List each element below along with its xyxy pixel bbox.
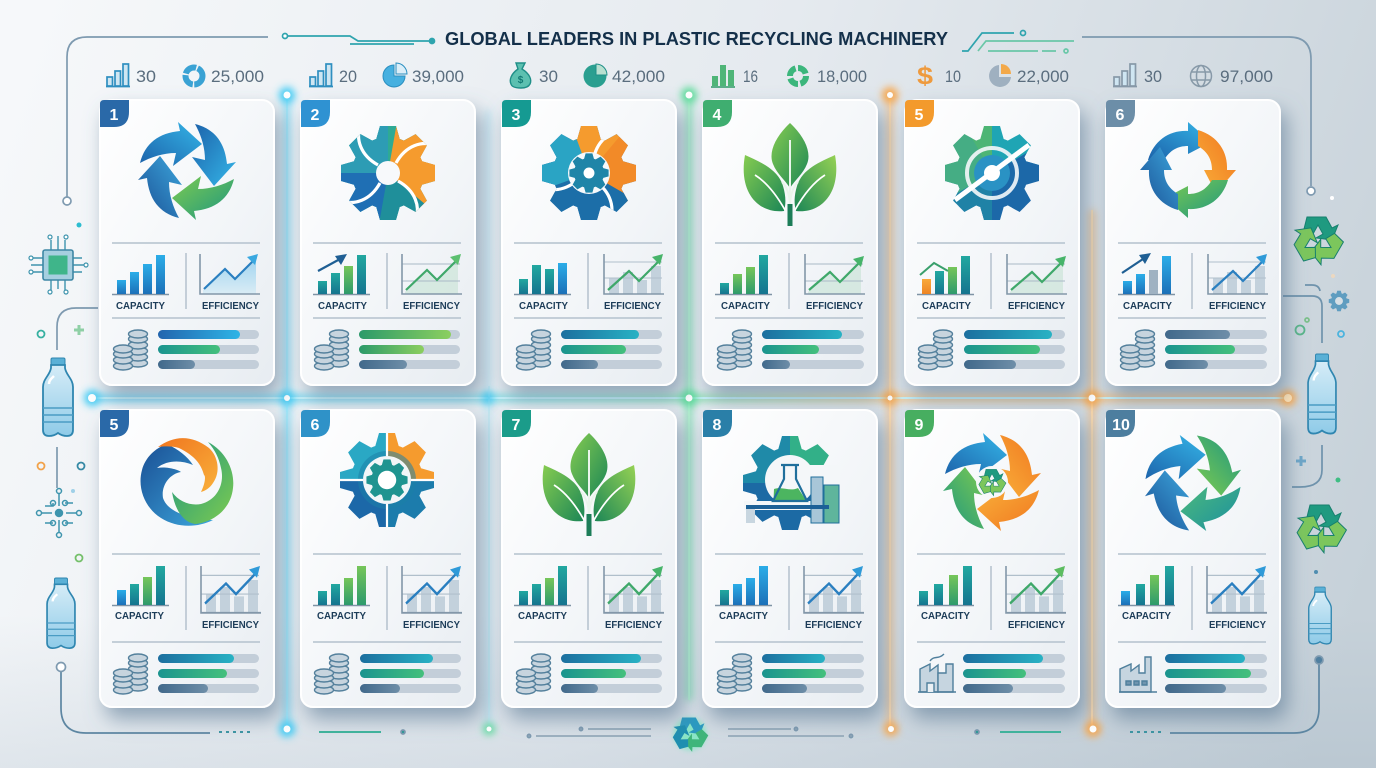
header stat 3: $	[518, 75, 524, 86]
header stat 1	[106, 64, 264, 86]
rank badge 1	[100, 100, 129, 127]
icon: coin stacks	[114, 654, 148, 694]
rank badge 3	[502, 100, 531, 127]
header stat 4	[711, 65, 867, 87]
efficiency chart	[402, 566, 462, 613]
card 8, rank 6	[301, 410, 475, 707]
progress bars	[1165, 654, 1267, 693]
progress bars	[158, 654, 259, 693]
efficiency label: EFFICIENCY	[1209, 301, 1266, 312]
icon: coin stacks	[516, 330, 550, 370]
efficiency label: EFFICIENCY	[604, 301, 661, 312]
icon: coin stacks	[314, 654, 348, 694]
capacity bars	[1118, 566, 1175, 606]
icon: plastic bottle 3	[1308, 354, 1336, 434]
progress bars	[1165, 330, 1267, 369]
efficiency chart	[201, 566, 261, 613]
capacity label: CAPACITY	[317, 611, 366, 622]
header stat 5: 22,000	[1017, 67, 1069, 86]
icon: factory	[1119, 657, 1157, 692]
capacity label: CAPACITY	[318, 301, 367, 312]
efficiency label: EFFICIENCY	[403, 301, 460, 312]
rank badge 5	[905, 100, 934, 127]
icon: coin stacks	[114, 330, 148, 370]
capacity label: CAPACITY	[115, 611, 164, 622]
rank badge 1: 1	[110, 107, 119, 124]
capacity bars	[917, 566, 974, 606]
header stat 6: 30	[1144, 67, 1162, 86]
capacity label: CAPACITY	[921, 611, 970, 622]
efficiency label: EFFICIENCY	[805, 620, 862, 631]
icon: recycle symbol top	[1288, 217, 1345, 269]
icon: coin stacks	[718, 330, 752, 370]
capacity bars	[1118, 253, 1175, 294]
efficiency chart	[604, 566, 664, 613]
capacity bars	[715, 255, 772, 294]
progress bars	[762, 330, 864, 369]
capacity bars	[514, 263, 571, 294]
rank badge 5: 5	[110, 417, 119, 434]
rank badge 6	[1106, 100, 1135, 127]
icon: factory	[918, 654, 956, 692]
glowing grid lines	[92, 95, 1288, 730]
header stat 5: 10	[945, 67, 961, 86]
icon: circular arrows	[1140, 122, 1236, 218]
card panel	[502, 410, 676, 707]
header stat 1: 30	[136, 67, 156, 86]
efficiency label: EFFICIENCY	[605, 620, 662, 631]
card panel	[905, 410, 1079, 707]
efficiency label: EFFICIENCY	[1008, 620, 1065, 631]
capacity bars	[112, 255, 169, 294]
rank badge 6: 6	[311, 417, 320, 434]
card 1	[100, 100, 274, 385]
rank badge 5: 5	[915, 107, 924, 124]
capacity label: CAPACITY	[518, 611, 567, 622]
card 4	[703, 100, 877, 385]
card 3	[502, 91, 676, 385]
progress bars	[359, 330, 460, 369]
icon: leaves	[543, 433, 635, 536]
right rail decorations	[1283, 196, 1352, 644]
left rail decorations	[29, 222, 98, 648]
progress bars	[964, 330, 1065, 369]
capacity bars	[313, 566, 370, 606]
progress bars	[762, 654, 864, 693]
card panel	[100, 410, 274, 707]
efficiency chart	[402, 254, 462, 294]
rank badge 9	[905, 410, 934, 437]
icon: coin stacks	[918, 330, 952, 370]
efficiency chart	[604, 254, 664, 294]
glowing nodes	[84, 87, 1296, 737]
efficiency chart	[804, 566, 864, 613]
rank badge 2	[301, 100, 330, 127]
icon: coin stacks	[718, 654, 752, 694]
rank badge 4	[703, 100, 732, 127]
capacity label: CAPACITY	[1122, 611, 1171, 622]
icon: four recycling arrows	[138, 122, 236, 220]
capacity bars	[917, 256, 974, 294]
progress bars	[561, 654, 662, 693]
card panel	[1106, 410, 1280, 707]
title right circuit decoration	[962, 30, 1074, 53]
capacity label: CAPACITY	[1123, 301, 1172, 312]
rank badge 3: 3	[512, 107, 521, 124]
header stat 1: 25,000	[211, 67, 264, 86]
rank badge 5	[100, 410, 129, 437]
icon: circuit node	[36, 488, 82, 538]
header stat 5: $	[917, 62, 933, 90]
efficiency label: EFFICIENCY	[1209, 620, 1266, 631]
efficiency label: EFFICIENCY	[202, 301, 259, 312]
card panel	[301, 100, 475, 385]
icon: recycle symbol bottom	[1291, 505, 1348, 557]
card panel	[301, 410, 475, 707]
title: GLOBAL LEADERS IN PLASTIC RECYCLING MACHINERY	[445, 29, 948, 49]
capacity label: CAPACITY	[922, 301, 971, 312]
rank badge 10: 10	[1112, 417, 1130, 434]
capacity label: CAPACITY	[719, 611, 768, 622]
rank badge 6: 6	[1116, 107, 1125, 124]
card 10, rank 8	[703, 410, 877, 707]
icon: plastic bottle 1	[43, 358, 73, 436]
efficiency chart	[805, 254, 865, 294]
icon: arrows with recycle center	[943, 433, 1041, 531]
icon: plastic bottle 2	[47, 578, 75, 648]
efficiency label: EFFICIENCY	[403, 620, 460, 631]
rank badge 9: 9	[915, 417, 924, 434]
rank badge 8	[703, 410, 732, 437]
rank badge 8: 8	[713, 417, 722, 434]
efficiency chart	[1007, 254, 1067, 294]
icon: coin stacks	[314, 330, 348, 370]
progress bars	[360, 654, 461, 693]
card 11, rank 9	[905, 410, 1079, 707]
efficiency label: EFFICIENCY	[1008, 301, 1065, 312]
icon: four arrows blue and green	[1142, 432, 1244, 534]
header stat 4: 18,000	[817, 67, 867, 86]
card panel	[502, 100, 676, 385]
header stat 3: 30	[539, 67, 558, 86]
efficiency chart	[1208, 254, 1268, 294]
title left circuit decoration	[282, 34, 434, 44]
progress bars	[963, 654, 1065, 693]
icon: processor chip	[29, 235, 88, 294]
icon: coin stacks	[1120, 330, 1154, 370]
progress bars	[561, 330, 662, 369]
card 9, rank 7	[502, 410, 676, 707]
efficiency label: EFFICIENCY	[806, 301, 863, 312]
efficiency chart	[200, 254, 260, 294]
header stat 2: 39,000	[412, 67, 464, 86]
card panel	[1106, 100, 1280, 385]
rank badge 10	[1106, 410, 1135, 437]
capacity label: CAPACITY	[519, 301, 568, 312]
icon: swirl gear	[341, 126, 435, 220]
capacity label: CAPACITY	[116, 301, 165, 312]
header stat 6	[1113, 64, 1273, 86]
card panel	[100, 100, 274, 385]
card panel	[703, 100, 877, 385]
card 7, rank 5	[100, 410, 274, 707]
icon: swirl disc	[141, 438, 233, 526]
capacity bars	[715, 566, 772, 606]
icon: leaves	[744, 123, 836, 226]
icon: gear with inner gear	[542, 126, 636, 220]
rank badge 4: 4	[713, 107, 722, 124]
capacity bars	[313, 254, 370, 294]
card 6	[1106, 100, 1280, 385]
header stat 5	[917, 62, 1069, 90]
efficiency chart	[1006, 566, 1066, 613]
header stat 2: 20	[339, 67, 357, 86]
icon: plastic bottle 4	[1309, 587, 1331, 644]
header stat 2	[309, 63, 464, 87]
progress bars	[158, 330, 259, 369]
icon: gear with center cog	[340, 433, 434, 527]
header stat 3	[510, 63, 665, 88]
icon: coin stacks	[516, 654, 550, 694]
header stat 3: 42,000	[612, 67, 665, 86]
icon: small gear	[1328, 290, 1350, 312]
efficiency chart	[1207, 566, 1267, 613]
rank badge 7: 7	[512, 417, 521, 434]
rank badge 2: 2	[311, 107, 320, 124]
icon: recycle bottom center	[668, 717, 709, 755]
header stat 4: 16	[743, 67, 758, 86]
header stat 6: 97,000	[1220, 67, 1273, 86]
card 12, rank 10	[1106, 410, 1280, 707]
capacity bars	[112, 566, 169, 606]
card panel	[905, 100, 1079, 385]
capacity bars	[514, 566, 571, 606]
capacity label: CAPACITY	[721, 301, 770, 312]
efficiency label: EFFICIENCY	[202, 620, 259, 631]
rank badge 7	[502, 410, 531, 437]
card 5	[905, 100, 1079, 385]
card 2	[301, 91, 475, 385]
rank badge 6	[301, 410, 330, 437]
icon: gear with flask and factory	[743, 436, 840, 530]
card panel	[703, 410, 877, 707]
icon: gear with slash	[945, 126, 1039, 220]
